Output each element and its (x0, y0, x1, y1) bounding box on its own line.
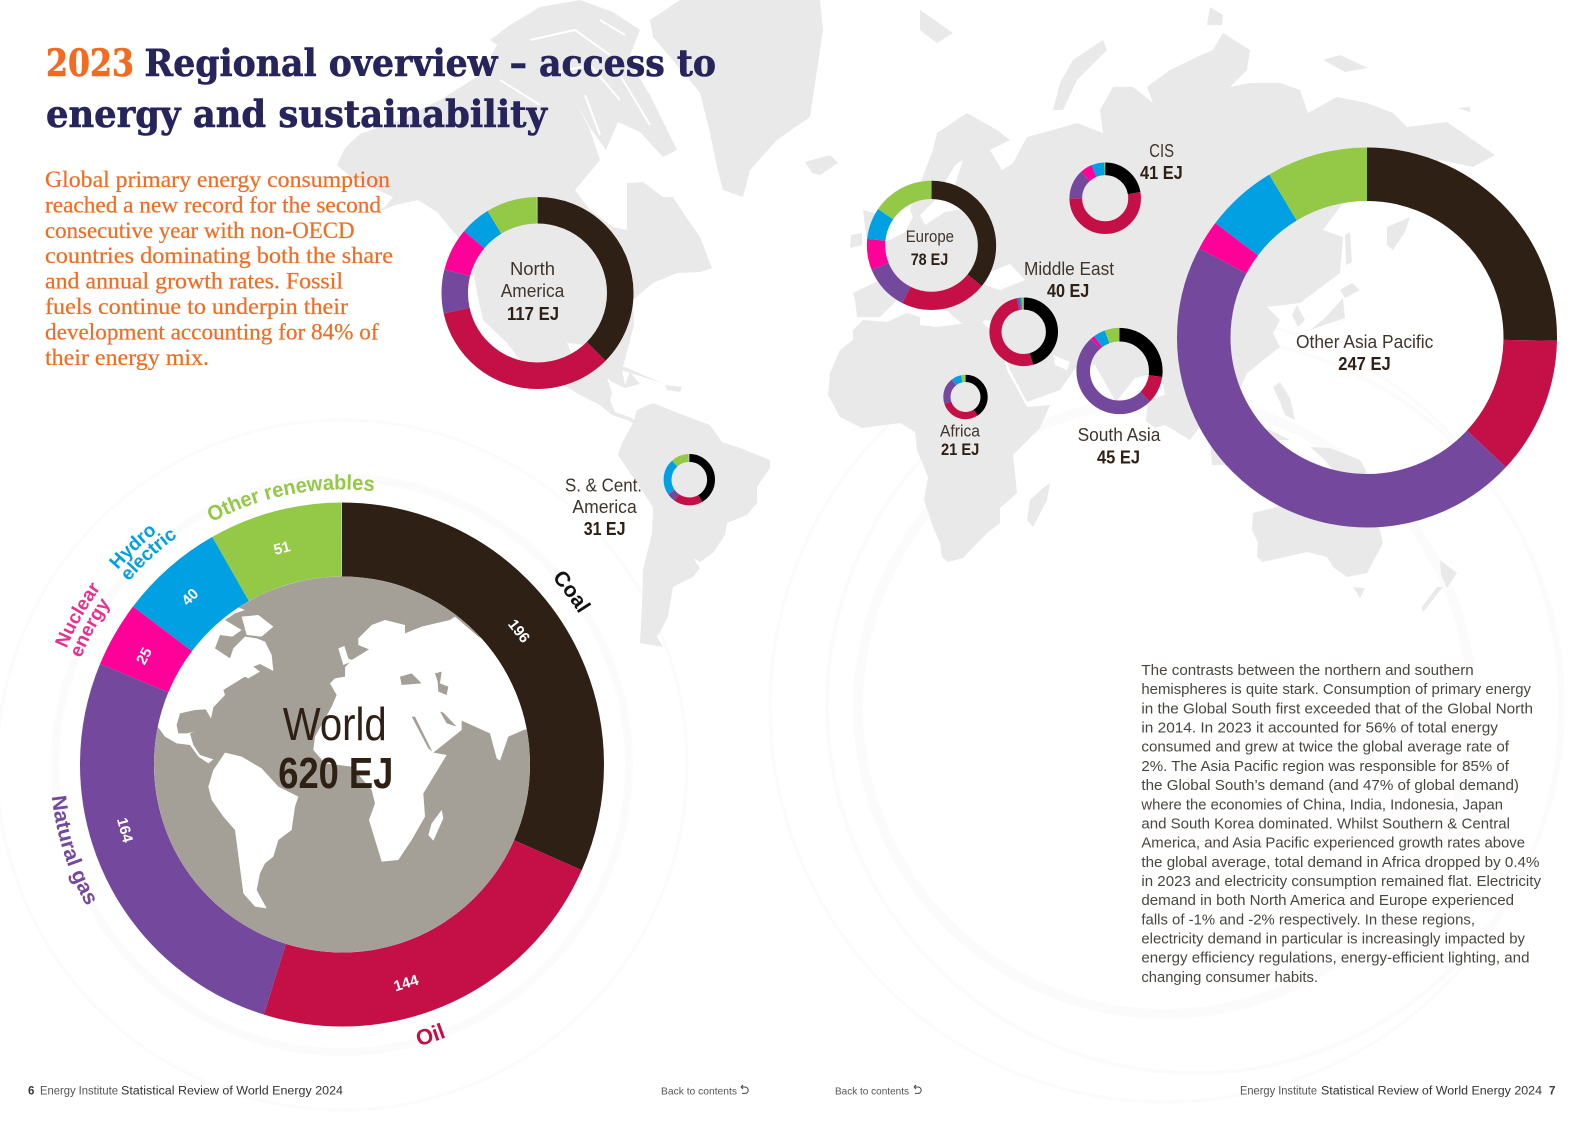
body paragraph: in 2014. In 2023 it accounted for 56% of total energy (1141, 720, 1499, 736)
donut: South and Central America (668, 458, 711, 501)
label: Other Asia Pacific: 247 EJ (1338, 354, 1391, 374)
donut: Other Asia Pacific (1204, 174, 1530, 501)
map: Australia (1252, 485, 1383, 577)
title: Regional overview – access to (144, 41, 716, 85)
back to contents link, right page: Back to contents (835, 1086, 909, 1098)
category label: electric: electric (123, 530, 176, 580)
category label: energy: energy (73, 598, 110, 656)
body paragraph: The contrasts between the northern and southern (1141, 662, 1474, 679)
label: Europe: 78 EJ (911, 250, 948, 269)
map: Korea and east China sea coast (1292, 305, 1305, 327)
segment values: 144 (392, 971, 421, 995)
map: Tasmania (1353, 587, 1365, 598)
donut: Europe (876, 190, 987, 301)
category label: Natural gas: Natural gas (52, 796, 95, 904)
title: 2023 (46, 41, 134, 85)
donut: Middle East (995, 304, 1052, 360)
back to contents link, left page: Back to contents (661, 1086, 737, 1098)
map: New Zealand (1422, 560, 1457, 612)
globe (145, 576, 545, 952)
category label: Oil: Oil (416, 1022, 445, 1044)
footer right: Statistical Review of World Energy 2024 (1321, 1086, 1543, 1098)
body paragraph: electricity demand in particular is increasingly impacted by (1141, 930, 1525, 948)
footer right (1240, 1086, 1555, 1098)
intro text: countries dominating both the share (45, 243, 393, 268)
footer left: Energy Institute (40, 1086, 118, 1098)
intro text: Global primary energy consumption (45, 167, 391, 192)
segment values: 196 (504, 616, 533, 646)
map: Iceland (805, 155, 838, 175)
label: South and Central America: America (572, 497, 638, 517)
body paragraph (1140, 662, 1541, 986)
segment values: 40 (178, 585, 202, 609)
footer right: Energy Institute (1240, 1086, 1317, 1098)
segment values: 51 (272, 538, 292, 559)
label: North America: North (510, 259, 555, 279)
label: South Asia (1078, 425, 1161, 468)
body paragraph: hemispheres is quite stark. Consumption of primary energy (1141, 681, 1531, 698)
label: North America: 117 EJ (507, 304, 559, 324)
body paragraph: 2%. The Asia Pacific region was responsible for 85% of (1141, 758, 1510, 775)
donut: South Asia (1083, 335, 1156, 407)
label: Middle East: 40 EJ (1047, 281, 1089, 301)
map: New Guinea (1310, 447, 1367, 480)
intro text: consecutive year with non-OECD (45, 218, 355, 243)
map: North America (337, 40, 712, 425)
category label: Other renewables: Other renewables (208, 474, 374, 520)
label: Other Asia Pacific: Other Asia Pacific (1296, 332, 1433, 352)
footer left: 6 (28, 1086, 34, 1098)
map: Eurasia (853, 33, 1495, 440)
map: Caribbean islands (610, 367, 682, 392)
label: North America: America (501, 281, 565, 301)
footer left: Statistical Review of World Energy 2024 (121, 1086, 344, 1098)
map: Canadian Arctic islands (490, 0, 677, 157)
body paragraph: where the economies of China, India, Indonesia, Japan (1140, 796, 1503, 813)
segment values: 25 (133, 645, 156, 668)
label: Middle East: Middle East (1024, 259, 1114, 279)
world label: World (283, 698, 387, 750)
body paragraph: and South Korea dominated. Whilst Southern & Central (1141, 815, 1510, 832)
label: Europe: Europe (906, 227, 954, 246)
body paragraph: the global average, total demand in Africa dropped by 0.4% (1141, 854, 1540, 871)
label: CIS: CIS (1149, 141, 1174, 161)
intro text: their energy mix. (45, 345, 209, 370)
category label: Nuclear: Nuclear (54, 582, 99, 648)
label: South and Central America: 31 EJ (584, 519, 626, 539)
label: Other Asia Pacific (1296, 332, 1433, 374)
world donut ring (117, 540, 567, 990)
background world map (337, 0, 1495, 647)
body paragraph: America, and Asia Pacific experienced growth rates above (1141, 835, 1525, 852)
label: Africa (940, 423, 981, 459)
label: Africa: Africa (940, 423, 981, 441)
map: Africa (828, 313, 1050, 562)
label: South and Central America (565, 475, 642, 539)
label: CIS (1140, 141, 1183, 183)
intro text: fuels continue to underpin their (45, 294, 348, 319)
intro text: reached a new record for the second (45, 192, 381, 217)
map: Madagascar (1027, 483, 1050, 527)
label: South Asia: 45 EJ (1097, 448, 1140, 468)
map: Greenland (650, 0, 823, 197)
donut: Africa (947, 378, 984, 416)
map: Philippines and Indonesia (1210, 382, 1295, 465)
map: Japan, Sakhalin, Kamchatka (1310, 217, 1410, 330)
map: Scandinavian islands, UK and Ireland (850, 210, 875, 248)
segment values: 164 (113, 816, 136, 845)
body paragraph: energy efficiency regulations, energy-efficient lighting, and (1141, 950, 1530, 967)
category label: Coal: Coal (555, 572, 592, 613)
footer left (28, 1086, 344, 1098)
map: Arctic Russian islands (920, 7, 1470, 112)
body paragraph: demand in both North America and Europe experienced (1141, 892, 1514, 909)
intro text (45, 167, 393, 370)
label: North America (501, 259, 565, 324)
map: South America (618, 403, 770, 647)
label: Africa: 21 EJ (941, 441, 979, 459)
intro text: and annual growth rates. Fossil (45, 269, 343, 294)
segment values (113, 538, 533, 995)
footer right: 7 (1549, 1086, 1555, 1098)
label: South Asia: South Asia (1078, 425, 1161, 445)
label: South and Central America: S. & Cent. (565, 475, 642, 495)
category label: Hydro: Hydro (108, 526, 155, 569)
donut: North America (455, 210, 620, 376)
title: energy and sustainability (46, 92, 548, 136)
label: Europe (906, 227, 954, 269)
body paragraph: falls of -1% and -2% respectively. In these regions, (1141, 911, 1475, 928)
body paragraph: the Global South’s demand (and 47% of global demand) (1141, 777, 1519, 794)
label: CIS: 41 EJ (1140, 163, 1183, 183)
body paragraph: in the Global South first exceeded that of the Global North (1141, 700, 1533, 717)
donut: CIS (1076, 169, 1135, 228)
label: Middle East (1024, 259, 1114, 301)
body paragraph: in 2023 and electricity consumption remained flat. Electricity (1141, 873, 1541, 890)
world total: 620 EJ (278, 749, 393, 798)
title (46, 41, 716, 136)
world donut chart (113, 538, 567, 995)
body paragraph: consumed and grew at twice the global average rate of (1141, 739, 1510, 756)
intro text: development accounting for 84% of (45, 319, 379, 344)
body paragraph: changing consumer habits. (1141, 969, 1318, 986)
